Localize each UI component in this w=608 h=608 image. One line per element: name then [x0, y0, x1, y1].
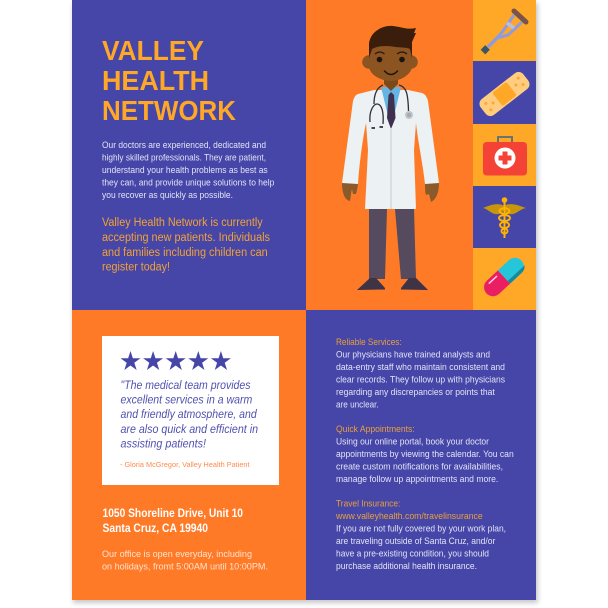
icon: medical kit	[483, 137, 527, 176]
panel: icon tile capsule	[473, 248, 536, 310]
panel: icon tile crutch	[473, 0, 536, 62]
text block: about the doctors: understand your health problems as best as	[102, 165, 268, 176]
text block: quick appointments: Quick Appointments:	[336, 424, 415, 435]
panel: icon tile caduceus	[473, 186, 536, 248]
panel: doctor illustration	[306, 0, 473, 310]
text block: travel insurance: have a pre-existing condition, you should	[336, 548, 489, 560]
text block: reliable services: clear records. They follow up with physicians	[336, 375, 505, 386]
text block: about the doctors: Our doctors are experienced, dedicated and	[102, 140, 266, 151]
title: VALLEY	[102, 35, 204, 66]
text block: accepting new patients: Valley Health Network is currently	[102, 217, 263, 229]
quote: excellent services in a warm	[120, 394, 253, 406]
text block: quick appointments: appointments by viewing the calendar. You can	[336, 449, 514, 460]
icon: caduceus	[483, 197, 526, 238]
panel: icon tile bandage	[473, 61, 536, 124]
icon: crutch	[481, 11, 526, 54]
text block: reliable services: regarding any discrepancies or points that	[336, 387, 495, 398]
text block: travel insurance: If you are not fully covered by your work plan,	[336, 524, 506, 534]
text block: travel insurance: purchase additional health insurance.	[336, 561, 477, 572]
panel: intro	[72, 0, 306, 310]
quote: are also quick and efficient in	[120, 424, 258, 436]
title	[102, 35, 236, 126]
panel: icon tile medical kit	[473, 124, 536, 186]
opening hours: Our office is open everyday, including	[102, 549, 252, 560]
title: HEALTH	[102, 65, 209, 96]
text block: quick appointments: manage follow up appointments and more.	[336, 474, 498, 485]
text block: travel insurance: Travel Insurance:	[336, 498, 400, 510]
text block: about the doctors: you recover as quickly as possible.	[102, 190, 233, 201]
text block: reliable services: Our physicians have trained analysts and	[336, 350, 490, 360]
text block: reliable services	[336, 337, 505, 411]
title: NETWORK	[102, 95, 236, 126]
text block: quick appointments	[336, 424, 514, 485]
rating stars	[121, 351, 231, 370]
text block: quick appointments: create custom notifications for availabilities,	[336, 462, 503, 472]
opening hours: on holidays, fromt 5:00AM until 10:00PM.	[102, 562, 268, 572]
address: Santa Cruz, CA 19940	[102, 523, 208, 535]
icon: bandage	[477, 69, 532, 119]
text block: travel insurance: are traveling outside of Santa Cruz, and/or	[336, 536, 496, 547]
text block: travel insurance	[335, 498, 506, 572]
icon: capsule	[480, 254, 528, 300]
icon: doctor	[342, 26, 439, 290]
quote: "The medical team provides	[120, 380, 251, 392]
text block: accepting new patients: accepting new patients. Individuals	[102, 232, 270, 244]
text block: accepting new patients	[102, 217, 270, 274]
panel: testimonial card	[102, 336, 279, 485]
quote: and friendly atmosphere, and	[120, 409, 257, 421]
text block: reliable services: are unclear.	[336, 400, 379, 411]
text block: about the doctors: they can, and provide unique solutions to help	[102, 178, 274, 189]
quote	[120, 380, 258, 450]
quote attribution: - Gloria McGregor, Valley Health Patient	[120, 460, 250, 469]
panel: services	[306, 310, 536, 600]
text block: about the doctors	[102, 140, 274, 201]
text block: about the doctors: highly skilled professionals. They are patient,	[102, 152, 266, 164]
text block: travel insurance: www.valleyhealth.com/travelinsurance	[335, 511, 483, 522]
address	[102, 508, 243, 535]
text block: accepting new patients: and families including children can	[102, 247, 268, 259]
text block: accepting new patients: register today!	[102, 262, 170, 274]
text block: reliable services: Reliable Services:	[336, 337, 402, 348]
panel: testimonial and address	[72, 310, 306, 600]
text block: quick appointments: Using our online portal, book your doctor	[336, 436, 490, 448]
text block: reliable services: data-entry staff who maintain consistent and	[336, 362, 505, 373]
opening hours	[102, 549, 268, 572]
address: 1050 Shoreline Drive, Unit 10	[102, 508, 243, 520]
quote: assisting patients!	[120, 438, 207, 450]
